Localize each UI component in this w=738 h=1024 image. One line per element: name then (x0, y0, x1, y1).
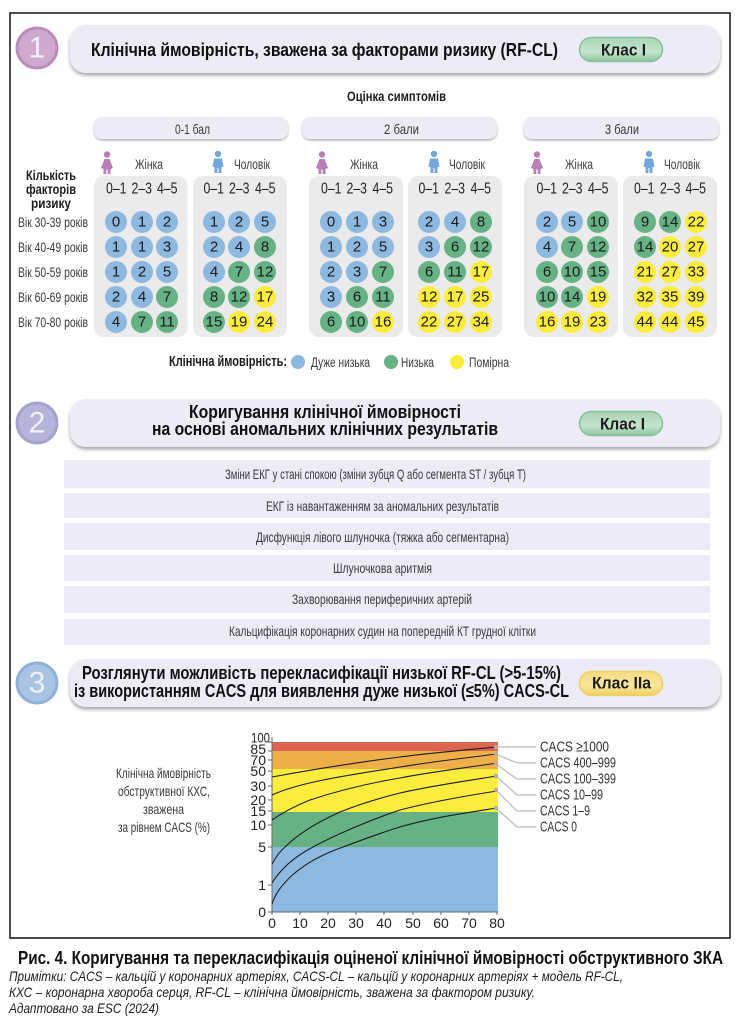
panel: score 3, man: 35 (662, 288, 678, 306)
panel: score 3, man: 14 (662, 214, 678, 230)
panel: score 0-1, woman: 5 (163, 264, 171, 280)
panel: score 2, man: 17 (447, 288, 463, 306)
panel: score 0-1, woman: 4 (112, 314, 120, 330)
icon: man (428, 151, 440, 173)
curve labels: CACS ≥1000 (540, 738, 609, 756)
panel: score 2, woman: 6 (353, 288, 361, 306)
section 3: reclassification using CACS (17, 659, 720, 931)
panel: score 0-1, woman (94, 176, 188, 337)
finding: peripheral artery disease: Захворювання периферичних артерій (292, 591, 472, 607)
section 1: risk-factor-weighted clinical likelihood (17, 25, 720, 370)
panel: score 0-1, woman: 2 (112, 288, 120, 306)
label: man: Чоловік (449, 156, 486, 172)
y-axis labels (250, 730, 270, 920)
panel: score 3, woman: 10 (539, 288, 555, 306)
age group labels (18, 214, 88, 330)
row axis heading: number of risk factors (26, 167, 76, 211)
curve labels: CACS 1–9 (540, 802, 590, 820)
panel: score 3, woman: 19 (590, 288, 606, 306)
panel: score 0-1, man (193, 176, 287, 337)
section 2: adjustment by abnormal clinical findings (17, 399, 720, 645)
panel: score 0-1, man: 2 (210, 238, 218, 256)
panel: score 0-1, woman: 7 (138, 314, 146, 330)
figure notes: Адаптовано за ESC (2024) (8, 1000, 159, 1016)
panel: score 3, woman (524, 176, 618, 337)
panel: score 2, woman: 3 (327, 288, 335, 306)
finding: ventricular arrhythmia (64, 555, 710, 581)
class badge: class I: Клас I (600, 414, 645, 434)
heading band 3: із використанням CACS для виявлення дуже низької (≤5%) CACS-CL (74, 681, 569, 701)
panel: score 0-1, woman: 2 (138, 264, 146, 280)
panel: score 2, man: 17 (473, 264, 489, 280)
panel: score 2, man: 25 (473, 288, 489, 306)
panel: score 2, woman: 6 (327, 314, 335, 330)
finding: resting ECG changes (64, 460, 710, 488)
x-axis labels: 30 (348, 915, 364, 931)
panel: score 2, man: 8 (477, 214, 485, 230)
panel: score 2, man: 11 (447, 264, 463, 280)
panel: score 2, woman: 0 (327, 214, 335, 230)
panel: score 3, man: 32 (637, 288, 653, 306)
curve leader lines (494, 745, 536, 827)
chart: likelihood by CACS (250, 730, 616, 931)
panel: score 0-1, woman: 11 (159, 314, 175, 330)
y-axis labels: 10 (250, 817, 266, 833)
panel: score 0-1, man: 2–3 (229, 180, 250, 198)
panel: score 0-1, woman: 1 (138, 238, 146, 256)
symptom score tab: 2: 2 бали (384, 121, 419, 137)
figure notes: КХС – коронарна хвороба серця, RF-CL – клінічна ймовірність, зважена за фактором ризику. (9, 984, 535, 1000)
panel: score 0-1, man: 12 (231, 288, 247, 306)
symptom score tab: 3: 3 бали (605, 121, 639, 137)
panel: score 3, man: 33 (688, 264, 704, 280)
heading band 2: Коригування клінічної ймовірності (189, 402, 461, 422)
age group labels: Вік 50-59 років (18, 264, 88, 280)
row axis heading: number of risk factors: ризику (31, 195, 71, 211)
panel: score 2, woman: 2 (353, 238, 361, 256)
panel: score 0-1, man: 1 (210, 214, 218, 230)
y-axis labels: 1 (258, 877, 266, 893)
panel: score 3, man: 21 (637, 264, 653, 280)
curves by CACS category (272, 747, 497, 904)
legend: clinical likelihood (169, 354, 509, 370)
panel: score 2, woman: 2 (327, 264, 335, 280)
panel: score 2, woman: 11 (375, 288, 391, 306)
chart y-axis title: обструктивної КХС, (118, 783, 210, 799)
class badge: class I (580, 38, 662, 62)
x-axis labels (268, 915, 505, 931)
panel: score 3, woman: 4 (543, 238, 551, 256)
chart y-axis title: за рівнем CACS (%) (118, 819, 210, 835)
figure notes (8, 968, 623, 1016)
panel: score 2, woman: 10 (349, 314, 365, 330)
x-axis labels: 80 (489, 915, 505, 931)
label: woman: Жінка (350, 156, 378, 172)
panel: score 0-1, woman: 1 (112, 238, 120, 256)
panel: score 2, man: 34 (473, 314, 489, 330)
panel: score 2, man: 2 (425, 214, 433, 230)
panel: score 3, woman: 5 (568, 214, 576, 230)
legend: clinical likelihood: Помірна (469, 354, 509, 370)
panel: score 0-1, man: 12 (257, 264, 273, 280)
panel: score 3, woman: 19 (564, 314, 580, 330)
legend: clinical likelihood: Низька (401, 354, 434, 370)
label: man: Чоловік (234, 156, 271, 172)
class badge: class IIa: Клас IIa (592, 674, 651, 692)
panel: score 3, woman: 7 (568, 238, 576, 256)
panel: score 3, woman: 16 (539, 314, 555, 330)
symptoms score heading: Оцінка симптомів (347, 88, 446, 104)
icon: man (644, 151, 654, 173)
chart y-axis title: Клінічна ймовірність (116, 765, 211, 781)
panel: score 2, man: 0–1 (418, 180, 439, 198)
x-axis labels: 0 (268, 915, 276, 931)
panel: score 3, man: 9 (641, 214, 649, 230)
finding: resting ECG changes: Зміни ЕКГ у стані спокою (зміни зубця Q або сегмента ST / зубця T) (225, 466, 526, 482)
age group labels: Вік 70-80 років (18, 314, 88, 330)
panel: score 3, woman: 0–1 (536, 180, 557, 198)
curve labels: CACS 100–399 (540, 770, 616, 788)
panel: score 0-1, man: 4–5 (255, 180, 276, 198)
label: man: Чоловік (664, 156, 701, 172)
finding: LV dysfunction: Дисфункція лівого шлуночка (тяжка або сегментарна) (256, 529, 509, 545)
symptom score tab: 3 (524, 117, 719, 139)
panel: score 0-1, man: 15 (206, 314, 222, 330)
figure notes: Примітки: CACS – кальцій у коронарних артеріях, CACS-CL – кальцій у коронарних артеріях + модель RF-CL, (9, 968, 623, 984)
panel: score 0-1, man: 17 (257, 288, 273, 306)
step number 3 (17, 663, 57, 703)
panel: score 3, man: 45 (688, 314, 704, 330)
panel: score 3, woman: 6 (543, 264, 551, 280)
panel: score 0-1, woman: 3 (163, 238, 171, 256)
symptom score tab: 0-1: 0-1 бал (175, 121, 210, 137)
panel: score 2, man: 2–3 (444, 180, 465, 198)
heading band 2 (70, 399, 720, 447)
panel: score 2, man: 22 (421, 314, 437, 330)
age group labels: Вік 40-49 років (18, 239, 88, 255)
panel: score 0-1, woman: 0 (112, 214, 120, 230)
heading band 2: на основі аномальних клінічних результатів (152, 419, 498, 439)
legend: clinical likelihood: Клінічна ймовірність: (169, 354, 287, 370)
panel: score 2, woman: 3 (353, 264, 361, 280)
chart y-axis title (116, 765, 211, 835)
panel: score 2, woman: 16 (375, 314, 391, 330)
panel: score 2, man: 4–5 (470, 180, 491, 198)
heading band 3 (70, 659, 720, 707)
panel: score 3, woman: 10 (590, 214, 606, 230)
heading band 1 (70, 25, 720, 73)
panel: score 0-1, man: 4 (210, 264, 218, 280)
panel: score 0-1, man: 2 (235, 214, 243, 230)
panel: score 3, man: 44 (637, 314, 653, 330)
step number 1: 1 (29, 32, 45, 64)
panel: score 3, woman: 15 (590, 264, 606, 280)
panel: score 3, man: 20 (662, 238, 678, 256)
panel: score 2, man: 6 (451, 238, 459, 256)
legend: clinical likelihood: Дуже низька (311, 354, 370, 370)
panel: score 0-1, man: 7 (235, 264, 243, 280)
panel: score 2, woman: 0–1 (321, 180, 342, 198)
panel: score 3, man: 39 (688, 288, 704, 306)
x-axis labels: 20 (320, 915, 336, 931)
panel: score 3, man: 0–1 (634, 180, 654, 198)
age group labels: Вік 60-69 років (18, 289, 88, 305)
finding: coronary calcification on CT (64, 619, 710, 645)
panel: score 2, man: 4 (451, 214, 459, 230)
panel: score 3, man: 27 (688, 238, 704, 256)
heading band 3: Розглянути можливість перекласифікації низької RF-CL (>5-15%) (82, 663, 561, 683)
row axis heading: number of risk factors: факторів (26, 181, 76, 197)
curve labels: CACS 400–999 (540, 754, 616, 772)
step number 3: 3 (29, 666, 45, 700)
panel: score 2, woman: 1 (327, 238, 335, 256)
label: woman: Жінка (565, 156, 593, 172)
class badge: class I (580, 412, 662, 436)
panel: score 2, woman: 1 (353, 214, 361, 230)
y-axis labels: 30 (250, 778, 266, 794)
panel: score 3, man: 14 (637, 238, 653, 256)
y-axis labels: 5 (258, 839, 266, 855)
panel: score 0-1, man: 0–1 (204, 180, 224, 198)
y-axis labels: 70 (250, 752, 266, 768)
panel: score 2, woman (309, 176, 403, 337)
panel: score 0-1, man: 8 (261, 238, 269, 256)
panel: score 0-1, man: 24 (257, 314, 273, 330)
panel: score 0-1, man: 4 (235, 238, 243, 256)
curve labels: CACS 10–99 (540, 786, 603, 804)
curve labels (540, 738, 616, 836)
panel: score 3, man: 4–5 (686, 180, 706, 198)
x-axis labels: 70 (461, 915, 477, 931)
panel: score 3, man: 44 (662, 314, 678, 330)
panel: score 3, man: 22 (688, 214, 704, 230)
symptom score tab: 2 (302, 117, 497, 139)
panel: score 2, woman: 7 (379, 264, 387, 280)
panel: score 0-1, man: 5 (261, 214, 269, 230)
x-axis labels: 40 (376, 915, 392, 931)
panel: score 2, man: 3 (425, 238, 433, 256)
panel: score 2, man: 12 (473, 238, 489, 256)
panel: score 3, woman: 10 (564, 264, 580, 280)
panel: score 2, man (408, 176, 502, 337)
chart y-axis title: зважена (143, 801, 184, 817)
heading band 1: Клінічна ймовірність, зважена за факторами ризику (RF-CL) (91, 40, 558, 60)
x-axis labels: 50 (405, 915, 421, 931)
y-axis labels: 85 (250, 741, 266, 757)
panel: score 2, woman: 2–3 (346, 180, 367, 198)
row axis heading: number of risk factors: Кількість (26, 167, 76, 183)
finding: stress ECG (64, 493, 710, 518)
panel: score 3, woman: 12 (590, 238, 606, 256)
icon: woman (101, 151, 113, 174)
panel: score 0-1, woman: 0–1 (106, 180, 126, 198)
panel: score 2, woman: 3 (379, 214, 387, 230)
panel: score 0-1, woman: 2 (163, 214, 171, 230)
icon: woman (316, 151, 328, 174)
y-axis labels: 0 (258, 904, 266, 920)
panel: score 2, man: 12 (421, 288, 437, 306)
icon: woman (531, 151, 543, 174)
icon: man (212, 151, 224, 173)
step number 1 (17, 28, 57, 68)
panel: score 2, man: 27 (447, 314, 463, 330)
x-axis labels: 60 (433, 915, 449, 931)
panel: score 0-1, man: 19 (231, 314, 247, 330)
panel: score 0-1, woman: 7 (163, 288, 171, 306)
panel: score 0-1, woman: 4–5 (157, 180, 178, 198)
y-axis labels: 100 (251, 730, 270, 746)
panel: score 3, woman: 23 (590, 314, 606, 330)
panel: score 0-1, woman: 4 (138, 288, 146, 306)
panel: score 2, woman: 4–5 (372, 180, 393, 198)
step number 2 (17, 403, 57, 443)
panel: score 3, woman: 2 (543, 214, 551, 230)
panel: score 3, man: 2–3 (660, 180, 680, 198)
panel: score 2, man: 6 (425, 264, 433, 280)
y-axis labels: 50 (250, 763, 266, 779)
finding: LV dysfunction (64, 523, 710, 550)
symptom score tab: 0-1 (94, 117, 288, 139)
panel: score 3, woman: 4–5 (588, 180, 608, 198)
panel: score 0-1, woman: 1 (138, 214, 146, 230)
panel: score 3, man: 27 (662, 264, 678, 280)
step number 2: 2 (29, 406, 45, 440)
finding: peripheral artery disease (64, 586, 710, 613)
panel: score 3, woman: 2–3 (562, 180, 582, 198)
finding: ventricular arrhythmia: Шлуночкова аритмія (333, 560, 432, 576)
curve labels: CACS 0 (540, 818, 577, 836)
label: woman: Жінка (135, 156, 163, 172)
class badge: class IIa (580, 672, 662, 696)
finding: coronary calcification on CT: Кальцифікація коронарних судин на попередній КТ грудної клітки (229, 623, 536, 639)
finding: stress ECG: ЕКГ із навантаженням за аномальних результатів (266, 498, 499, 514)
panel: score 0-1, woman: 2–3 (132, 180, 152, 198)
panel: score 3, man (623, 176, 717, 337)
panel: score 0-1, woman: 1 (112, 264, 120, 280)
panel: score 2, woman: 5 (379, 238, 387, 256)
y-axis labels: 20 (250, 792, 266, 808)
panel: score 3, woman: 14 (564, 288, 580, 306)
age group labels: Вік 30-39 років (18, 214, 88, 230)
panel: score 0-1, man: 8 (210, 288, 218, 306)
class badge: class I: Клас I (601, 40, 646, 60)
y-axis labels: 15 (250, 803, 266, 819)
x-axis labels: 10 (292, 915, 308, 931)
